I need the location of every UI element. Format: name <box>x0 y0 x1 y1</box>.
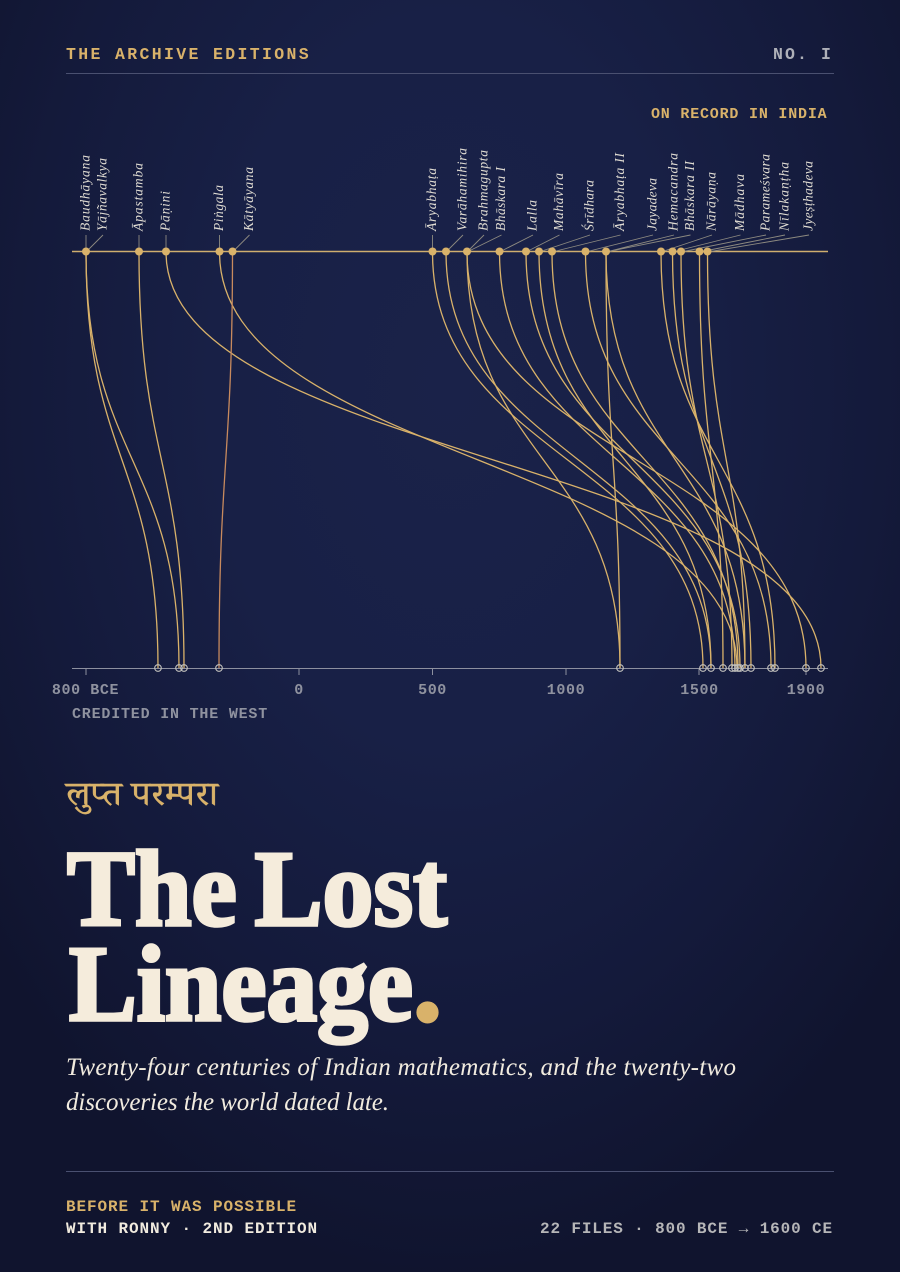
footer <box>66 1171 834 1238</box>
header: NO. I <box>773 45 833 64</box>
main title: The Lost <box>67 830 447 949</box>
axis ticks and year labels: 1900 <box>787 682 825 699</box>
subtitle: discoveries the world dated late. <box>66 1089 389 1116</box>
label: credited in the west: CREDITED IN THE WEST <box>72 706 268 723</box>
axis ticks and year labels: 500 <box>418 682 447 699</box>
top axis <box>72 250 828 252</box>
mathematician names: Āryabhaṭa II <box>612 152 627 232</box>
bottom axis <box>72 668 828 670</box>
leader lines <box>86 235 809 252</box>
mathematician names: Bhāskara II <box>682 160 697 231</box>
Devanagari title: लुप्त परम्परा <box>64 774 220 827</box>
mathematician names: Kātyāyana <box>241 167 256 232</box>
header: THE ARCHIVE EDITIONS <box>66 45 311 64</box>
lineage curves <box>86 252 821 668</box>
title period: . <box>415 930 440 1041</box>
axis ticks and year labels: 800 BCE <box>52 682 119 699</box>
mathematician names: Nīlakaṇṭha <box>776 162 792 232</box>
mathematician names <box>78 148 816 232</box>
main title <box>67 830 447 1044</box>
axis ticks and year labels <box>52 668 825 699</box>
mathematician names: Jayadeva <box>644 178 660 231</box>
axis ticks and year labels: 1500 <box>680 682 719 699</box>
lineage chart <box>52 148 828 723</box>
footer: BEFORE IT WAS POSSIBLE <box>66 1198 297 1216</box>
mathematician names: Varāhamihira <box>454 148 470 231</box>
mathematician names: Pāṇini <box>158 191 172 232</box>
footer: WITH RONNY · 2ND EDITION <box>66 1220 318 1238</box>
mathematician names: Brahmagupta <box>476 150 490 231</box>
mathematician names: Āryabhaṭa <box>424 168 439 232</box>
mathematician names: Baudhāyana <box>78 155 92 231</box>
top markers <box>82 248 712 256</box>
mathematician names: Yājñavalkya <box>94 158 110 231</box>
subtitle: Twenty-four centuries of Indian mathematics, and the twenty-two <box>66 1054 736 1081</box>
bottom markers <box>155 665 824 671</box>
mathematician names: Piṅgala <box>211 185 226 232</box>
mathematician names: Śrīdhara <box>582 180 596 231</box>
main title: Lineage <box>69 925 413 1044</box>
mathematician names: Hemacandra <box>666 153 680 232</box>
label: on record in India: ON RECORD IN INDIA <box>651 106 827 123</box>
axis ticks and year labels: 1000 <box>547 682 585 699</box>
mathematician names: Jyeṣṭhadeva <box>800 161 816 231</box>
header <box>66 45 834 74</box>
mathematician names: Bhāskara I <box>493 166 508 231</box>
mathematician names: Nārāyaṇa <box>704 172 718 232</box>
axis ticks and year labels: 0 <box>294 682 304 699</box>
footer: 22 FILES · 800 BCE → 1600 CE <box>540 1220 833 1238</box>
mathematician names: Mādhava <box>732 174 747 232</box>
mathematician names: Lalla <box>524 200 540 232</box>
mathematician names: Parameśvara <box>758 154 772 232</box>
subtitle <box>66 1054 736 1116</box>
mathematician names: Āpastamba <box>130 163 146 232</box>
mathematician names: Mahāvīra <box>551 173 566 232</box>
